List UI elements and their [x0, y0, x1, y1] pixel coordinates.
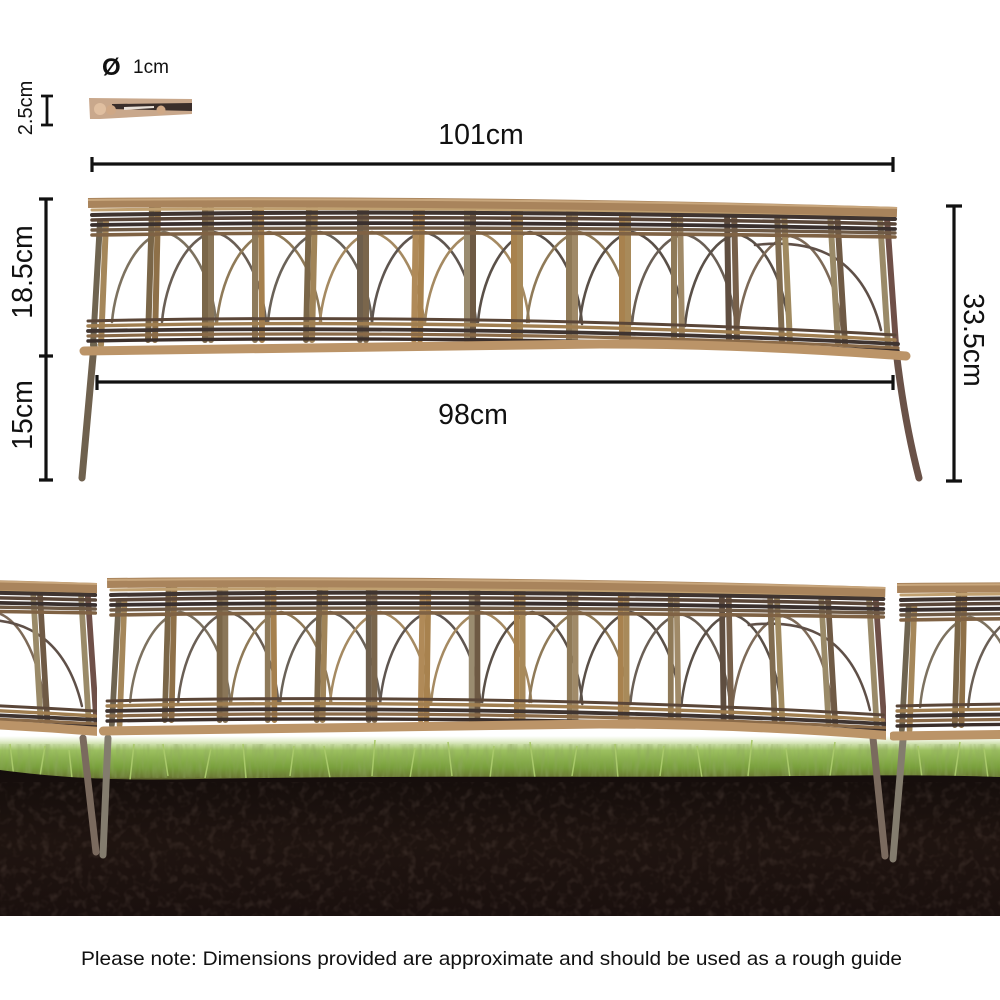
fence panel: installed right neighbour — [893, 584, 1000, 859]
dimension: 33.5cm total height — [946, 206, 989, 481]
left leg — [82, 345, 94, 478]
dimension: 18.5cm upper height and 15cm stake: 18.5cm — [7, 225, 39, 319]
icon: willow cross section — [89, 98, 192, 119]
panel: grass and soil scene — [0, 736, 1000, 916]
right leg — [896, 350, 919, 478]
dimension: 98cm stake spacing: 98cm — [438, 399, 508, 431]
fence panel: installed centre — [103, 579, 894, 856]
fence panel: dimensioned — [82, 199, 919, 478]
grass strip — [0, 736, 1000, 784]
note text: Please note: Dimensions provided are approximate and should be used as a rough guide — [81, 948, 902, 970]
icon: diameter label: 1cm — [133, 57, 169, 78]
dimension: 33.5cm total height: 33.5cm — [957, 293, 989, 387]
fence panel: installed left neighbour — [0, 575, 106, 852]
dimension: 2.5cm thickness: 2.5cm — [15, 81, 37, 135]
dimension: 18.5cm upper height and 15cm stake — [7, 199, 53, 480]
dimension: 2.5cm thickness — [15, 81, 53, 135]
dimension: 18.5cm upper height and 15cm stake: 15cm — [7, 380, 39, 450]
dimension: 101cm width — [92, 119, 893, 172]
dimension: 98cm stake spacing — [97, 375, 893, 431]
icon: diameter label — [102, 54, 169, 81]
icon: diameter label: Ø — [102, 54, 121, 81]
soil block — [0, 770, 1000, 916]
dimension: 101cm width: 101cm — [438, 119, 524, 151]
